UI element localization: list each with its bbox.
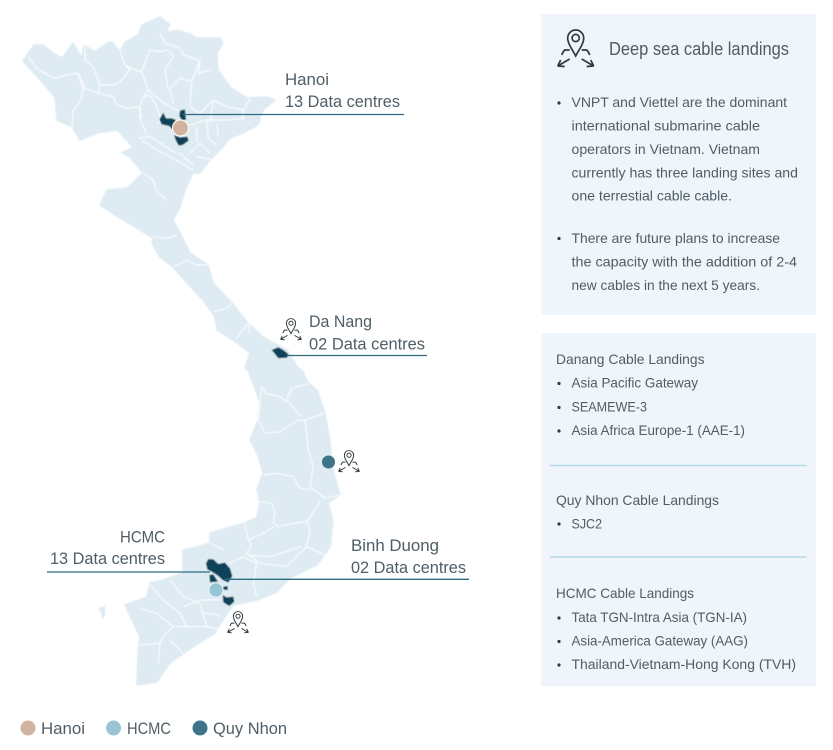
callout: Hanoi: Hanoi bbox=[285, 70, 329, 89]
map of Vietnam bbox=[23, 17, 340, 685]
callout: Binh Duong: 02 Data centres bbox=[351, 558, 466, 577]
panel heading: Deep sea cable landings bbox=[609, 39, 789, 59]
highlighted region: HCMC and Binh Duong bbox=[206, 559, 234, 606]
callout: Da Nang bbox=[287, 312, 427, 356]
list: Quy Nhon cable landings bbox=[556, 492, 719, 532]
callout: Da Nang: 02 Data centres bbox=[309, 334, 425, 354]
icon: HCMC cable landing bbox=[228, 612, 248, 633]
callout: HCMC: HCMC bbox=[120, 528, 165, 546]
icon: Quy Nhon cable landing bbox=[339, 451, 359, 472]
marker: Hanoi bbox=[172, 120, 188, 136]
marker: Quy Nhon bbox=[322, 456, 335, 468]
bullet text: future plans: the capacity with the addition of 2-4 bbox=[572, 254, 797, 270]
legend item: Hanoi bbox=[20, 719, 85, 738]
list: HCMC cable landings: HCMC Cable Landings bbox=[556, 585, 694, 601]
list: Danang cable landings: Asia Pacific Gateway bbox=[572, 375, 698, 391]
list: Danang cable landings: SEAMEWE-3 bbox=[572, 399, 647, 415]
list: HCMC cable landings: Asia-America Gateway (AAG) bbox=[572, 633, 748, 649]
list: Quy Nhon cable landings: Quy Nhon Cable Landings bbox=[556, 492, 719, 508]
list: Danang cable landings: Asia Africa Europe-1 (AAE-1) bbox=[572, 422, 745, 438]
list: HCMC cable landings: Tata TGN-Intra Asia (TGN-IA) bbox=[572, 609, 747, 625]
callout: Hanoi: 13 Data centres bbox=[285, 92, 400, 111]
bullet text: operators: international submarine cable bbox=[572, 118, 760, 134]
highlighted region: Hanoi area bbox=[159, 109, 189, 146]
province borders south bbox=[138, 384, 340, 663]
list: Danang cable landings: Danang Cable Landings bbox=[556, 351, 704, 367]
bullet text: future plans: new cables in the next 5 years. bbox=[572, 277, 760, 293]
legend item: Quy Nhon: Quy Nhon bbox=[213, 719, 287, 738]
bullet text: operators: one terrestial cable cable. bbox=[572, 188, 732, 204]
callout: HCMC bbox=[47, 528, 210, 572]
bullet text: operators: operators in Vietnam. Vietnam bbox=[572, 141, 760, 157]
panel: deep sea cable landings bbox=[541, 14, 816, 315]
panel: cable landings list bbox=[541, 333, 816, 686]
map landmass bbox=[23, 17, 340, 685]
bullet text: operators: currently has three landing sites and bbox=[572, 164, 798, 180]
list: HCMC cable landings bbox=[556, 585, 796, 672]
bullet text: operators: VNPT and Viettel are the dominant bbox=[572, 94, 787, 110]
province borders north bbox=[28, 33, 250, 200]
province borders central bbox=[153, 235, 250, 338]
legend item: Hanoi: Hanoi bbox=[41, 719, 85, 738]
icon: cable landing pin bbox=[558, 30, 594, 66]
icon: Da Nang cable landing bbox=[281, 319, 301, 340]
bullet text: future plans bbox=[557, 230, 797, 293]
list: Quy Nhon cable landings: SJC2 bbox=[572, 516, 602, 532]
highlighted region: Da Nang bbox=[272, 347, 288, 358]
bullet text: operators bbox=[557, 94, 798, 204]
legend bbox=[20, 719, 287, 738]
callout: HCMC: 13 Data centres bbox=[50, 549, 165, 568]
callout: Binh Duong bbox=[225, 536, 469, 579]
legend item: HCMC: HCMC bbox=[127, 719, 171, 738]
legend item: HCMC bbox=[106, 719, 171, 738]
marker: HCMC bbox=[209, 583, 223, 597]
callout: Binh Duong: Binh Duong bbox=[351, 536, 439, 555]
list: Danang cable landings bbox=[556, 351, 745, 438]
callout: Da Nang: Da Nang bbox=[309, 312, 372, 331]
callout: Hanoi bbox=[183, 70, 404, 114]
list: HCMC cable landings: Thailand-Vietnam-Hong Kong (TVH) bbox=[572, 656, 796, 672]
bullet text: future plans: There are future plans to increase bbox=[572, 230, 780, 246]
